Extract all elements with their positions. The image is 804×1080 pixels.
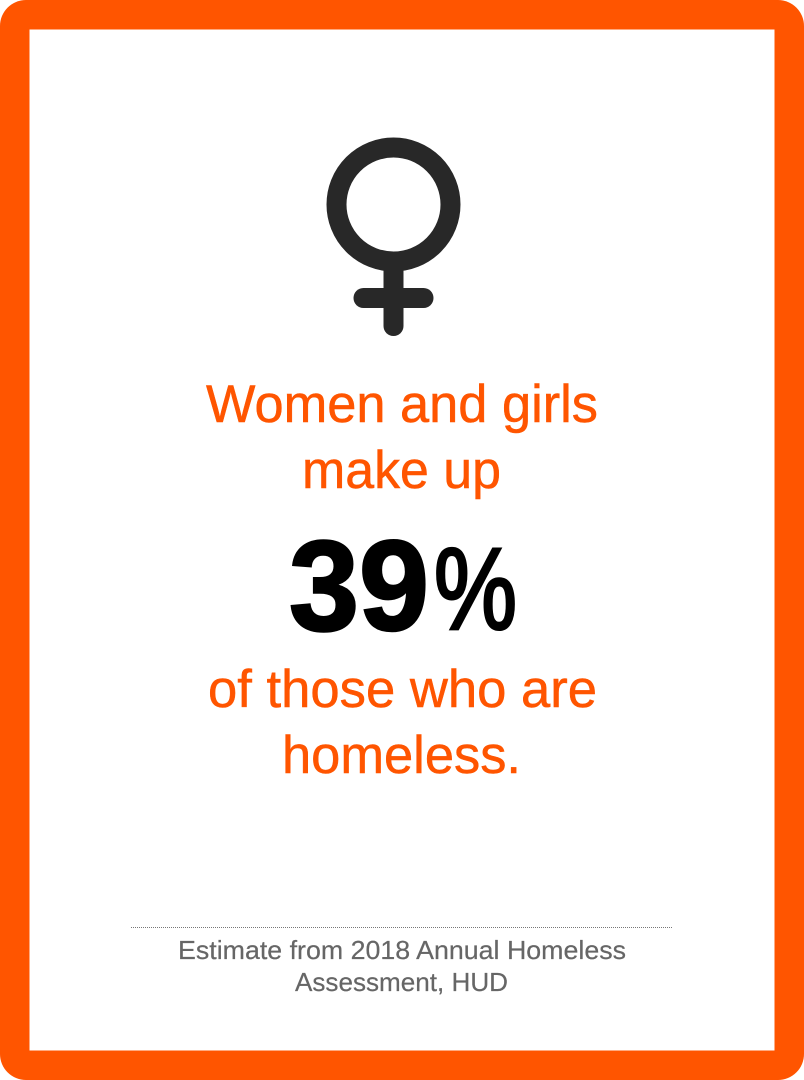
text: of those who are homeless: homeless. [282,726,521,785]
heading: women and girls make up: make up [302,441,501,500]
source note [178,935,626,997]
source note: Assessment, HUD [295,967,508,997]
text: of those who are homeless: of those who are [208,660,597,719]
heading: women and girls make up [206,375,598,500]
big number: 39 percent [289,515,517,658]
text: of those who are homeless [208,660,597,785]
big number: 39 percent: 39 [289,515,429,658]
big number: 39 percent: % [434,524,517,654]
heading: women and girls make up: Women and girls [206,375,598,434]
icon: female symbol [336,148,450,326]
source note: Estimate from 2018 Annual Homeless [178,935,626,965]
